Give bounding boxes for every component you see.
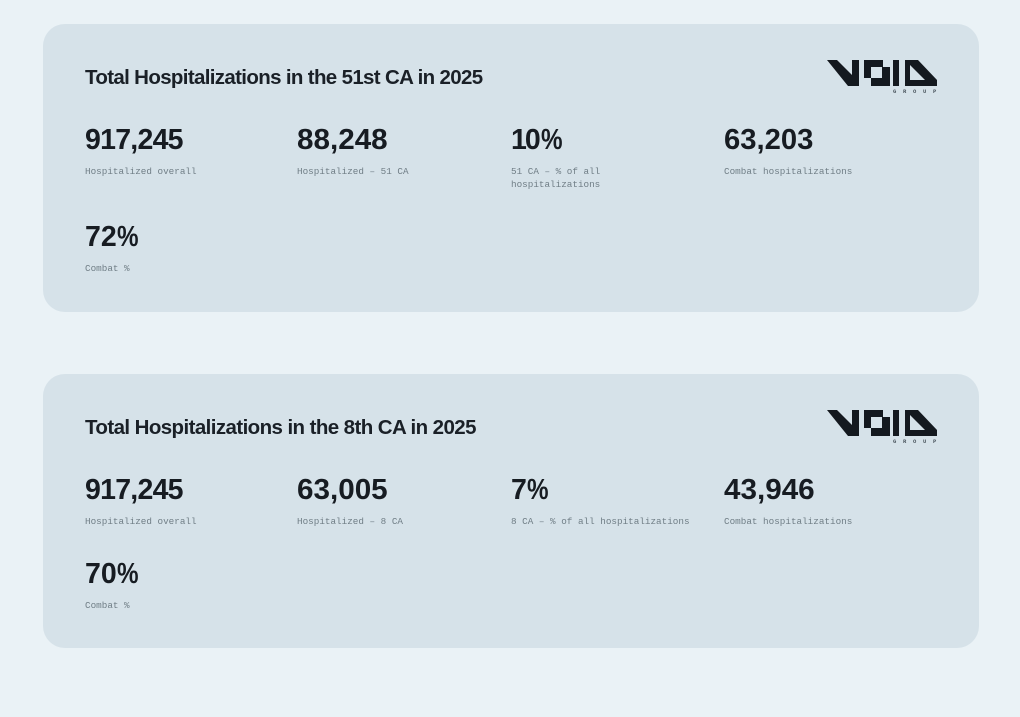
panel: 8th CA hospitalizations: 63,005	[297, 474, 388, 506]
title: 51st CA: Total Hospitalizations in the 51st CA in 2025	[85, 66, 482, 89]
stat: hospitalized 8 CA	[297, 474, 403, 527]
panel: 8th CA hospitalizations: 70	[85, 558, 117, 590]
panel: 51st CA hospitalizations: Hospitalized overall	[85, 166, 197, 177]
panel: 51st CA hospitalizations: %	[541, 124, 562, 156]
stat: 8 CA percent of all	[511, 474, 690, 527]
panel: 8th CA hospitalizations: 917,245	[85, 474, 183, 506]
panel: 8th CA hospitalizations: 43,946	[724, 474, 815, 506]
panel: 8th CA hospitalizations: 8 CA – % of all hospitalizations	[511, 516, 690, 527]
panel: 8th CA hospitalizations: %	[527, 474, 548, 506]
stat: combat percent	[85, 221, 138, 274]
stat: combat hospitalizations	[724, 124, 852, 177]
panel: 8th CA hospitalizations: Combat %	[85, 600, 130, 611]
panel: 51st CA hospitalizations: 72	[85, 221, 117, 253]
panel: 51st CA hospitalizations: 88,248	[297, 124, 388, 156]
stat: hospitalized overall	[85, 474, 197, 527]
panel: 8th CA hospitalizations: Combat hospitalizations	[724, 516, 852, 527]
panel: 51st CA hospitalizations: 10	[511, 124, 541, 156]
panel: 8th CA hospitalizations: Hospitalized – 8 CA	[297, 516, 403, 527]
panel: 51st CA hospitalizations: Hospitalized – 51 CA	[297, 166, 409, 177]
logo: Void Group	[827, 410, 938, 445]
logo: Void Group	[827, 60, 938, 95]
stat: hospitalized 51 CA	[297, 124, 409, 177]
stat: combat hospitalizations	[724, 474, 852, 527]
panel: 51st CA hospitalizations: Combat hospitalizations	[724, 166, 852, 177]
stat: hospitalized overall	[85, 124, 197, 177]
panel: 51st CA hospitalizations: 917,245	[85, 124, 183, 156]
stat: 51 CA percent of all	[511, 124, 600, 190]
panel: 8th CA hospitalizations: %	[117, 558, 138, 590]
panel: 8th CA hospitalizations: 7	[511, 474, 527, 506]
panel: 51st CA hospitalizations: %	[117, 221, 138, 253]
panel: 51st CA hospitalizations: 51 CA – % of all hospitalizations	[511, 166, 600, 190]
panel: 51st CA hospitalizations: Combat %	[85, 263, 130, 274]
title: 8th CA: Total Hospitalizations in the 8th CA in 2025	[85, 416, 476, 439]
panel: 8th CA hospitalizations	[43, 374, 979, 648]
panel: 51st CA hospitalizations: 63,203	[724, 124, 813, 156]
panel: 8th CA hospitalizations: Hospitalized overall	[85, 516, 197, 527]
panel: 51st CA hospitalizations	[43, 24, 979, 312]
stat: combat percent	[85, 558, 138, 611]
